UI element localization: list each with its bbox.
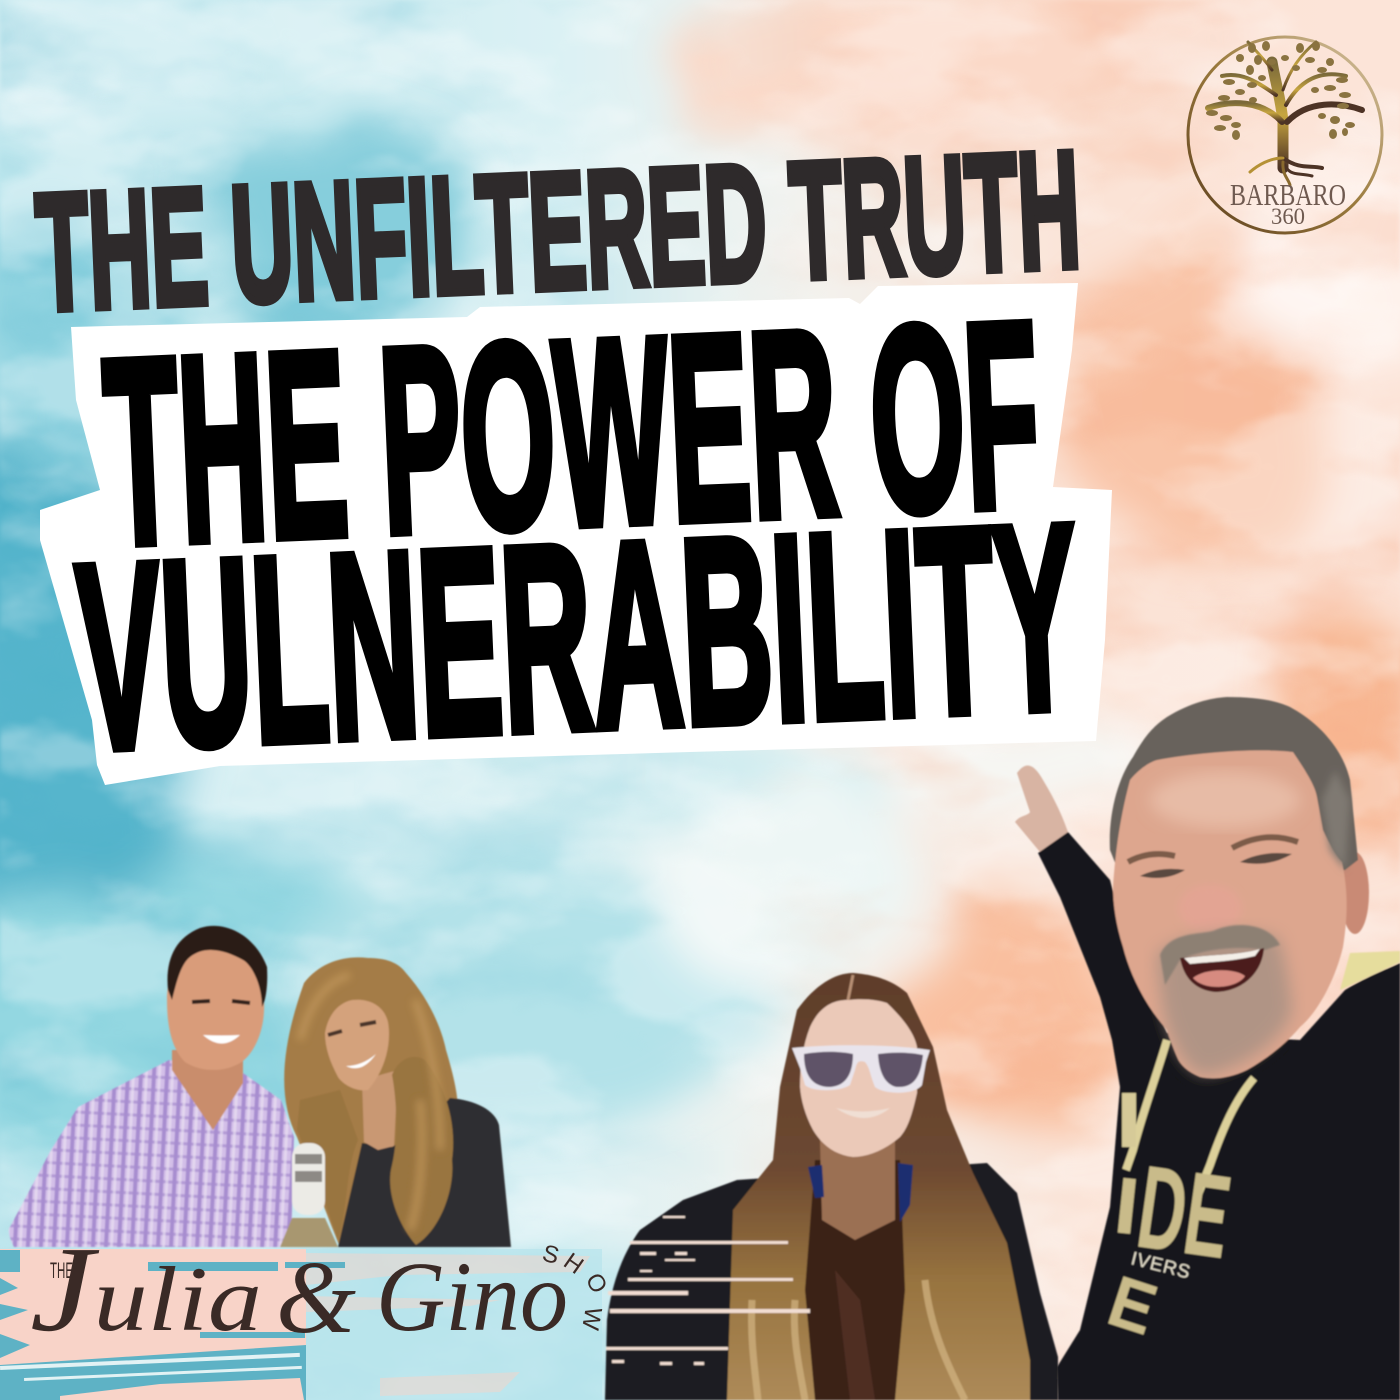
woman's hair bbox=[284, 957, 458, 1247]
woman's curl highlights bbox=[300, 975, 440, 1230]
hoodie strings bbox=[1126, 1040, 1254, 1197]
gray sideburn bbox=[1322, 770, 1350, 870]
hoodie and raised arm bbox=[1038, 832, 1400, 1400]
hair highlights bbox=[752, 1280, 965, 1400]
jacket bbox=[605, 1163, 1058, 1400]
photo: girl with sunglasses bbox=[605, 973, 1058, 1400]
hoodie lettering: I bbox=[1110, 1160, 1143, 1251]
hair bbox=[1110, 697, 1358, 870]
woman's face bbox=[325, 1000, 389, 1090]
photo: host couple bbox=[9, 926, 511, 1247]
moustache bbox=[1160, 925, 1280, 985]
sunglasses bbox=[792, 1045, 930, 1093]
ear bbox=[1341, 852, 1369, 934]
tongue bbox=[1193, 970, 1245, 987]
show logo: ampersand: & bbox=[276, 1240, 356, 1355]
smile bbox=[836, 1108, 890, 1118]
man's shirt bbox=[9, 1060, 294, 1247]
show logo: Show: O bbox=[580, 1268, 613, 1298]
blue hair feathers bbox=[808, 1163, 913, 1222]
teeth bbox=[1184, 949, 1260, 964]
show logo: Show bbox=[539, 1240, 613, 1332]
logo: Barbaro 360 tree in circle bbox=[1188, 37, 1382, 233]
tree leaves bbox=[1206, 41, 1355, 140]
man's neck bbox=[172, 1050, 243, 1130]
tree trunk and branches bbox=[1208, 42, 1362, 185]
man's head bbox=[167, 944, 264, 1070]
woman's sweater bbox=[338, 1098, 511, 1247]
show logo: Show: H bbox=[559, 1248, 588, 1280]
hair bbox=[727, 973, 1030, 1400]
raised hand bbox=[1015, 765, 1068, 852]
logo number: 360 bbox=[1271, 204, 1305, 229]
show logo: Gino: Gino bbox=[376, 1241, 568, 1352]
eyebrows bbox=[1128, 837, 1298, 862]
neck bbox=[820, 1140, 895, 1240]
hair part bbox=[848, 975, 853, 1000]
man's hair bbox=[167, 926, 267, 1007]
show logo: Show: W bbox=[576, 1305, 607, 1332]
woman's eyes bbox=[328, 1022, 376, 1035]
show logo: The: THE bbox=[50, 1258, 73, 1283]
hoodie lettering bbox=[1099, 1093, 1238, 1351]
white sticker behind headline bbox=[40, 283, 1112, 785]
hood lining bbox=[1340, 951, 1400, 990]
microphone bbox=[280, 1143, 338, 1247]
nose bbox=[1178, 884, 1242, 932]
hoodie lettering: E bbox=[1099, 1261, 1166, 1351]
man's smile bbox=[203, 1035, 240, 1044]
man's eyes bbox=[192, 1001, 250, 1003]
photo: man pointing upward bbox=[1015, 697, 1400, 1400]
woman's smile bbox=[346, 1054, 376, 1068]
jacket stripes bbox=[606, 1216, 810, 1365]
mouth bbox=[1180, 948, 1264, 992]
show logo: brush band bbox=[0, 1222, 613, 1400]
show logo: Julia: Julia bbox=[30, 1222, 262, 1357]
show logo: Show: S bbox=[539, 1240, 562, 1270]
woman's curls over shoulder bbox=[297, 1057, 453, 1245]
face bbox=[800, 999, 917, 1157]
forehead highlight bbox=[1150, 772, 1300, 828]
head bbox=[1113, 750, 1347, 1078]
logo wordmark: BARBARO bbox=[1230, 177, 1346, 212]
beard stubble bbox=[1157, 932, 1292, 1075]
eyes bbox=[1140, 853, 1292, 878]
hoodie lettering: IVERS bbox=[1129, 1248, 1192, 1283]
hair center shadow bbox=[805, 1160, 905, 1400]
hoodie lettering: DE bbox=[1130, 1141, 1238, 1284]
woman's neck bbox=[362, 1070, 398, 1150]
